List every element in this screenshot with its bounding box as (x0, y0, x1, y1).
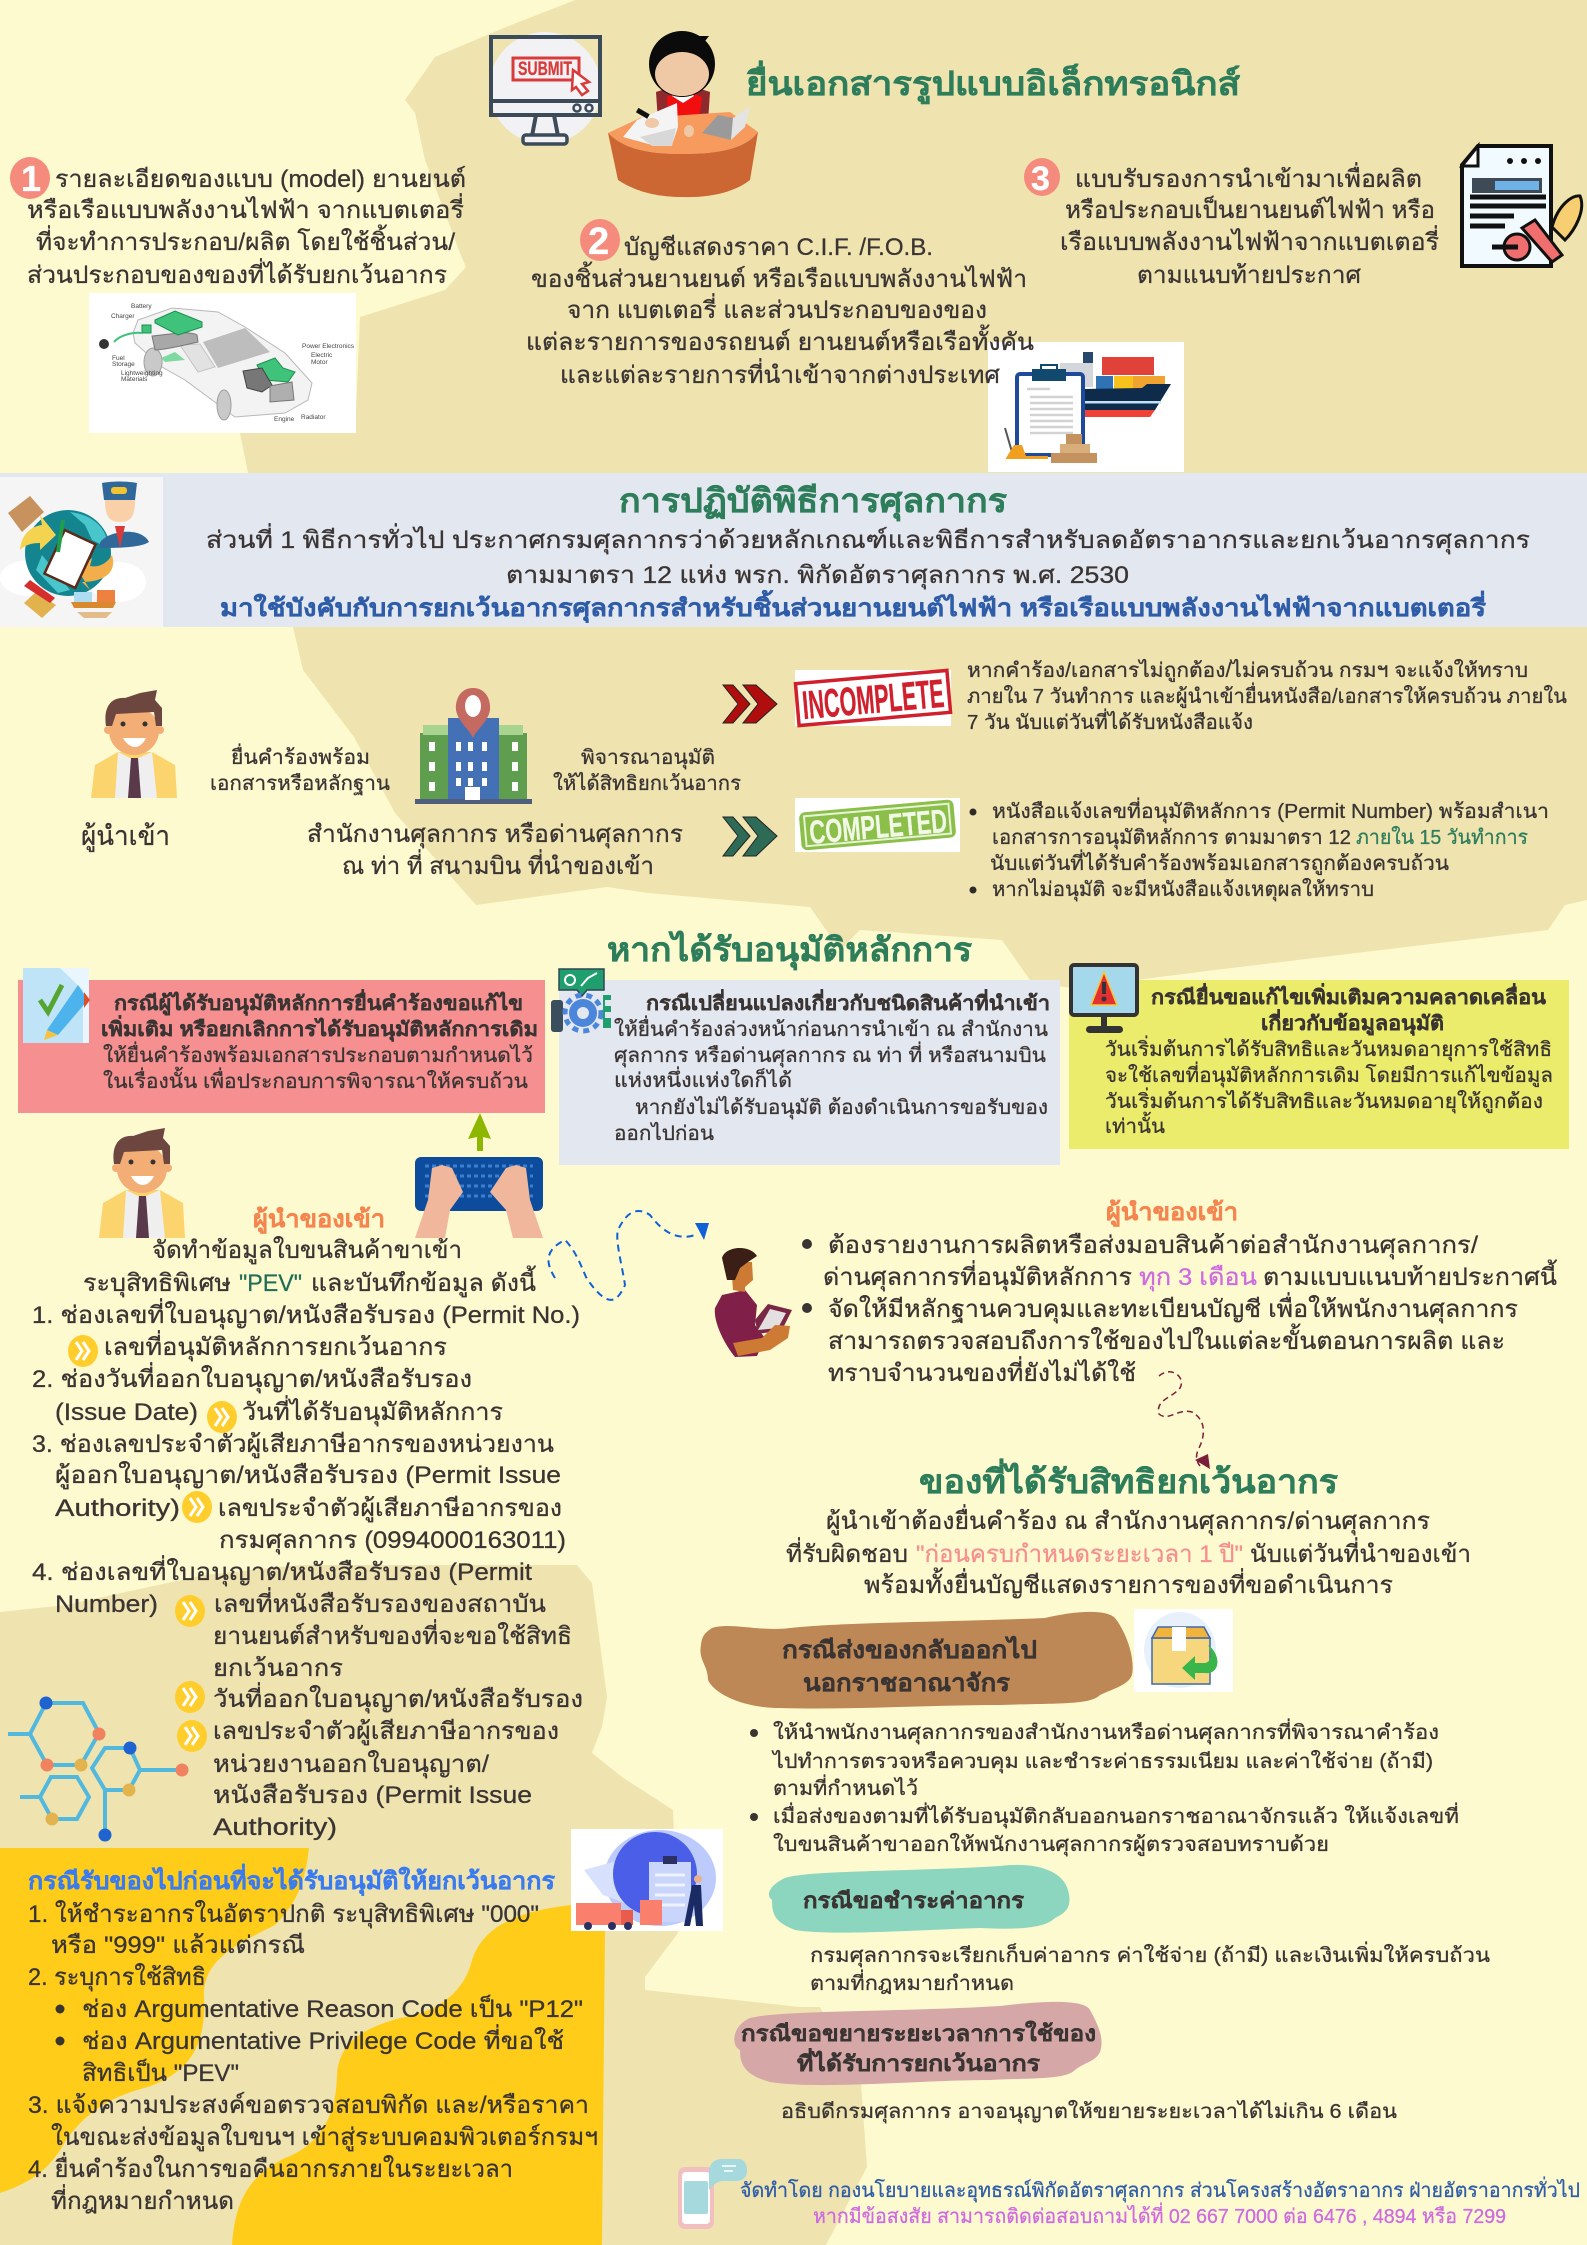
label: importer: ผู้นำเข้า (81, 821, 170, 852)
image: EV car diagram: Lightweighting (121, 370, 163, 377)
badge: number 3 (1024, 158, 1060, 198)
text block: completed notice: นับแต่วันที่ได้รับคำร้องพร้อมเอกสารถูกต้องครบถ้วน (990, 849, 1449, 876)
label blob: re-export case: นอกราชอาณาจักร (803, 1670, 1010, 1697)
arrow: green up arrow (468, 1113, 491, 1151)
text block: item 2 CIF FOB price list (526, 234, 1034, 389)
text block: duty collection (810, 1941, 1490, 1995)
text block: prepare import entry: วันที่ได้รับอนุมัติหลักการ (242, 1395, 503, 1427)
text block: one-year deadline: ผู้นำเข้าต้องยื่นคำร้อง ณ สำนักงานศุลกากร/ด่านศุลกากร (826, 1504, 1430, 1536)
text block: reporting duties: ต้องรายงานการผลิตหรือส่งมอบสินค้าต่อสำนักงานศุลกากร/ (828, 1232, 1478, 1260)
text block: incomplete notice: ภายใน 7 วันทำการ และผู้นำเข้ายื่นหนังสือ/เอกสารให้ครบถ้วน ภายใน (967, 682, 1567, 709)
panel: correction of data (1069, 980, 1569, 1149)
text block: item 2 CIF FOB price list: บัญชีแสดงราคา C.I.F. /F.O.B. (624, 234, 933, 261)
panel: correction of data: วันเริ่มต้นการได้รับสิทธิและวันหมดอายุให้ถูกต้อง (1105, 1087, 1543, 1114)
background shape: yellow wave left (0, 1848, 309, 2193)
text block: prepare import entry: หน่วยงานออกใบอนุญาต/ (213, 1750, 489, 1779)
text: submit request with documents (210, 743, 390, 795)
panel: correction of data: จะใช้เลขที่อนุมัติหลักการเดิม โดยมีการแก้ไขข้อมูล (1105, 1061, 1553, 1088)
icon: woman at desk (608, 31, 758, 197)
image: EV car diagram: Fuel (112, 355, 125, 362)
icon: document with stamp (1462, 146, 1582, 266)
text block: prepare import entry: และบันทึกข้อมูล ดังนี้ (311, 1265, 536, 1298)
image: EV car diagram: Materials (121, 376, 148, 383)
icon: submit monitor (489, 32, 601, 144)
text block: re-export steps: ใบขนสินค้าขาออกให้พนักงานศุลกากรผู้ตรวจสอบทราบด้วย (773, 1833, 1329, 1857)
image: EV car diagram: Battery (131, 303, 152, 310)
text block: prepare import entry: 1. ช่องเลขที่ใบอนุญาต/หนังสือรับรอง (Permit No.) (32, 1298, 580, 1330)
text block: prepare import entry (32, 1236, 583, 1841)
icon: yellow chevron bullet 6 (177, 1720, 207, 1752)
text block: re-export steps: ไปทำการตรวจหรือควบคุม และชำระค่าธรรมเนียม และค่าใช้จ่าย (ถ้ามี) (771, 1750, 1433, 1774)
text block: incomplete notice (967, 659, 1567, 734)
icon: yellow chevron bullet 2 (207, 1401, 237, 1433)
image: EV car diagram: Power Electronics (302, 343, 355, 350)
text block: prepare import entry: ผู้ออกใบอนุญาต/หนังสือรับรอง (Permit Issue (55, 1461, 561, 1490)
icon: submit monitor: SUBMIT (518, 59, 572, 80)
text block: duty collection: ตามที่กฎหมายกำหนด (810, 1969, 1014, 1995)
text block: prepare import entry: Number) (55, 1591, 158, 1618)
footer: prepared by: จัดทำโดย กองนโยบายและอุทธรณ์พิกัดอัตราศุลกากร ส่วนโครงสร้างอัตราอากร ฝ่ายอัตราอากรทั่วไป (740, 2176, 1580, 2203)
text block: re-export steps: เมื่อส่งของตามที่ได้รับอนุมัติกลับออกนอกราชอาณาจักรแล้ว ให้แจ้งเลขที่ (773, 1802, 1459, 1829)
text block: prepare import entry: Authority) (213, 1814, 337, 1841)
text block: item 3 import certificate: แบบรับรองการนำเข้ามาเพื่อผลิต (1075, 162, 1422, 193)
stamp: completed: COMPLETED (808, 802, 948, 851)
panel: product type change: ออกไปก่อน (614, 1122, 714, 1145)
text block: prepare import entry: 2. ช่องวันที่ออกใบอนุญาต/หนังสือรับรอง (32, 1362, 472, 1394)
stamp: incomplete: INCOMPLETE (801, 672, 946, 728)
text block: prepare import entry: กรมศุลกากร (0994000163011) (219, 1527, 566, 1555)
panel: refund case before approval: ช่อง Argumentative Reason Code เป็น "P12" (82, 1994, 583, 2023)
text block: item 2 CIF FOB price list: ของชิ้นส่วนยานยนต์ หรือเรือแบบพลังงานไฟฟ้า (531, 261, 1027, 293)
panel: refund case before approval: ช่อง Argumentative Privilege Code ที่ขอใช้ (82, 2024, 564, 2055)
panel: product type change: แห่งหนึ่งแห่งใดก็ได้ (614, 1066, 792, 1092)
icon: pencil and check (23, 968, 90, 1043)
panel: refund case before approval: ที่กฎหมายกำหนด (51, 2184, 234, 2215)
text block: prepare import entry: หนังสือรับรอง (Permit Issue (213, 1782, 532, 1809)
badge: number 1 (10, 157, 50, 199)
badge: number 2 (580, 219, 620, 263)
text block: item 3 import certificate: ตามแนบท้ายประกาศ (1137, 262, 1361, 289)
text block: completed notice: เอกสารการอนุมัติหลักการ ตามมาตรา 12 (992, 827, 1351, 850)
text block: reporting duties (802, 1232, 1557, 1387)
text block: one-year deadline: "ก่อนครบกำหนดระยะเวลา 1 ปี" (916, 1541, 1243, 1568)
panel: amend or cancel approval (18, 968, 545, 1113)
text block: item 1 model details (27, 165, 466, 289)
panel: refund case before approval: สิทธิเป็น "PEV" (82, 2058, 239, 2087)
stamp: incomplete (795, 670, 951, 729)
background shape: middle tan area (293, 627, 1587, 988)
text block: one-year deadline: นับแต่วันที่นำของเข้า (1250, 1537, 1471, 1568)
text block: prepare import entry: วันที่ออกใบอนุญาต/หนังสือรับรอง (213, 1682, 583, 1714)
heading: if approved in principle: หากได้รับอนุมัติหลักการ (607, 930, 972, 971)
text: consider approval: พิจารณาอนุมัติ (581, 747, 715, 770)
label: customs office: สำนักงานศุลกากร หรือด่านศุลกากร (307, 821, 683, 849)
panel: product type change (559, 980, 1060, 1165)
icon: importer person (91, 690, 177, 798)
icon: yellow chevron bullet 5 (175, 1681, 205, 1713)
text block: incomplete notice: หากคำร้อง/เอกสารไม่ถูกต้อง/ไม่ครบถ้วน กรมฯ จะแจ้งให้ทราบ (967, 659, 1528, 683)
text block: duty collection: กรมศุลกากรจะเรียกเก็บค่าอากร ค่าใช้จ่าย (ถ้ามี) และเงินเพิ่มให้ครบถ้วน (810, 1941, 1490, 1968)
text block: prepare import entry: 3. ช่องเลขประจำตัวผู้เสียภาษีอากรของหน่วยงาน (32, 1431, 554, 1459)
image: EV car diagram: Engine (274, 416, 295, 423)
text: submit request with documents: เอกสารหรือหลักฐาน (210, 773, 390, 795)
icon: gears and chart (551, 969, 611, 1032)
arrow: green double chevron (723, 817, 777, 856)
panel: product type change: ศุลกากร หรือด่านศุลกากร ณ ท่า ที่ หรือสนามบิน (614, 1041, 1046, 1068)
text block: item 3 import certificate (1060, 162, 1439, 289)
badge: number 2: 2 (588, 221, 609, 263)
panel: refund case before approval: ในขณะส่งข้อมูลใบขนฯ เข้าสู่ระบบคอมพิวเตอร์กรมฯ (51, 2123, 598, 2152)
image: EV car diagram (89, 293, 356, 433)
label: customs office: ณ ท่า ที่ สนามบิน ที่นำของเข้า (342, 849, 654, 880)
text block: prepare import entry: เลขประจำตัวผู้เสียภาษีอากรของ (218, 1495, 562, 1523)
text block: item 2 CIF FOB price list: แต่ละรายการของรถยนต์ ยานยนต์หรือเรือทั้งคัน (526, 324, 1034, 356)
text block: item 3 import certificate: หรือประกอบเป็นยานยนต์ไฟฟ้า หรือ (1065, 195, 1435, 224)
text: application to EV parts: มาใช้บังคับกับการยกเว้นอากรศุลกากรสำหรับชิ้นส่วนยานยนต์ไฟฟ้า หรือเรือแบบพลังงานไฟฟ้าจากแบตเตอรี่ (220, 589, 1486, 624)
panel: amend or cancel approval: กรณีผู้ได้รับอนุมัติหลักการยื่นคำร้องขอแก้ไข (114, 988, 523, 1017)
text block: item 1 model details: รายละเอียดของแบบ (model) ยานยนต์ (55, 165, 466, 193)
icon: customs officer and globe (0, 477, 163, 627)
panel: refund case before approval: 1. ให้ชำระอากรในอัตราปกติ ระบุสิทธิพิเศษ "000" (28, 1900, 539, 1929)
badge: number 1: 1 (21, 158, 41, 199)
image: cargo ship and clipboard (988, 342, 1184, 472)
icon: yellow chevron bullet 1 (68, 1335, 98, 1367)
text block: prepare import entry: Authority) (55, 1495, 180, 1522)
text block: one-year deadline: พร้อมทั้งยื่นบัญชีแสดงรายการของที่ขอดำเนินการ (864, 1567, 1393, 1599)
image: EV car diagram: Charger (111, 313, 135, 320)
panel: refund case before approval (28, 1863, 598, 2215)
text block: item 1 model details: หรือเรือแบบพลังงานไฟฟ้า จากแบตเตอรี่ (27, 193, 464, 224)
label blob: duty payment case (769, 1865, 1069, 1933)
image: EV car diagram: Electric (311, 352, 333, 359)
text block: completed notice: หนังสือแจ้งเลขที่อนุมัติหลักการ (Permit Number) พร้อมสำเนา (992, 797, 1549, 824)
text: section 12 reference: ตามมาตรา 12 แห่ง พรก. พิกัดอัตราศุลกากร พ.ศ. 2530 (506, 562, 1129, 590)
text: extension limit: อธิบดีกรมศุลกากร อาจอนุญาตให้ขยายระยะเวลาได้ไม่เกิน 6 เดือน (781, 2100, 1397, 2124)
badge: number 3: 3 (1031, 160, 1050, 198)
text block: item 1 model details: ที่จะทำการประกอบ/ผลิต โดยใช้ชิ้นส่วน/ (36, 224, 455, 256)
label blob: re-export case: กรณีส่งของกลับออกไป (782, 1635, 1037, 1664)
arrow: dark red dashed curve (1158, 1372, 1210, 1469)
text block: re-export steps: ให้นำพนักงานศุลกากรของสำนักงานหรือด่านศุลกากรที่พิจารณาคำร้อง (773, 1718, 1439, 1745)
panel: product type change: ให้ยื่นคำร้องล่วงหน้าก่อนการนำเข้า ณ สำนักงาน (614, 1015, 1048, 1041)
stamp: completed (795, 798, 960, 852)
text: submit request with documents: ยื่นคำร้องพร้อม (231, 743, 370, 769)
footer: contact: หากมีข้อสงสัย สามารถติดต่อสอบถามได้ที่ 02 667 7000 ต่อ 6476 , 4894 หรือ 7299 (813, 2202, 1506, 2228)
title: electronic document submission: ยื่นเอกสารรูปแบบอิเล็กทรอนิกส์ (746, 60, 1241, 105)
background shape: bottom-left tan area (0, 1565, 867, 2245)
panel: customs procedure banner (0, 473, 1587, 627)
background shape: yellow wave bottom (232, 1905, 605, 2245)
heading: duty-exempted goods: ของที่ได้รับสิทธิยกเว้นอากร (919, 1458, 1338, 1500)
text block: one-year deadline: ที่รับผิดชอบ (786, 1537, 908, 1568)
text block: prepare import entry: "PEV" (239, 1270, 302, 1297)
text block: completed notice: หากไม่อนุมัติ จะมีหนังสือแจ้งเหตุผลให้ทราบ (992, 878, 1374, 902)
label blob: extension case: ที่ได้รับการยกเว้นอากร (797, 2047, 1040, 2076)
label: goods importer right: ผู้นำของเข้า (1106, 1199, 1238, 1227)
panel: product type change: หากยังไม่ได้รับอนุมัติ ต้องดำเนินการขอรับของ (635, 1096, 1048, 1120)
text block: completed notice: ภายใน 15 วันทำการ (1356, 826, 1528, 849)
text block: item 3 import certificate: เรือแบบพลังงานไฟฟ้าจากแบตเตอรี่ (1060, 225, 1439, 256)
label: goods importer left: ผู้นำของเข้า (253, 1206, 385, 1234)
text block: re-export steps: ตามที่กำหนดไว้ (773, 1774, 918, 1800)
text: consider approval (553, 747, 741, 795)
panel: correction of data: วันเริ่มต้นการได้รับสิทธิและวันหมดอายุการใช้สิทธิ (1105, 1035, 1552, 1062)
text block: prepare import entry: เลขที่อนุมัติหลักการยกเว้นอากร (104, 1330, 447, 1362)
image: EV car diagram: Radiator (301, 414, 326, 421)
text block: one-year deadline (786, 1504, 1471, 1599)
text block: reporting duties: สามารถตรวจสอบถึงการใช้ของไปในแต่ละขั้นตอนการผลิต และ (828, 1323, 1505, 1355)
icon: returned parcel (1134, 1609, 1233, 1692)
panel: refund case before approval: 3. แจ้งความประสงค์ขอตรวจสอบพิกัด และ/หรือราคา (28, 2091, 589, 2119)
text block: prepare import entry: (Issue Date) (55, 1399, 198, 1426)
text block: prepare import entry: ระบุสิทธิพิเศษ (83, 1270, 231, 1298)
panel: refund case before approval: หรือ "999" แล้วแต่กรณี (51, 1932, 305, 1959)
background shape: top tan area (240, 0, 1587, 473)
panel: refund case before approval: 4. ยื่นคำร้องในการขอคืนอากรภายในระยะเวลา (28, 2152, 513, 2183)
text block: prepare import entry: เลขประจำตัวผู้เสียภาษีอากรของ (213, 1718, 559, 1746)
arrow: red double chevron (723, 685, 777, 723)
label blob: duty payment case: กรณีขอชำระค่าอากร (803, 1888, 1024, 1913)
text block: prepare import entry: ยกเว้นอากร (213, 1655, 343, 1682)
label blob: extension case: กรณีขอขยายระยะเวลาการใช้ของ (741, 2020, 1096, 2046)
panel: correction of data: เกี่ยวกับข้อมูลอนุมัติ (1261, 1008, 1444, 1037)
panel: amend or cancel approval: เพิ่มเติม หรือยกเลิกการได้รับอนุมัติหลักการเดิม (101, 1014, 538, 1042)
icon: man with tablet (715, 1248, 792, 1357)
panel: refund case before approval: กรณีรับของไปก่อนที่จะได้รับอนุมัติให้ยกเว้นอากร (28, 1863, 555, 1897)
panel: correction of data: กรณียื่นขอแก้ไขเพิ่มเติมความคลาดเคลื่อน (1151, 982, 1546, 1009)
label blob: re-export case (700, 1612, 1133, 1708)
heading: customs procedures: การปฏิบัติพิธีการศุลกากร (619, 482, 1007, 522)
text block: prepare import entry: 4. ช่องเลขที่ใบอนุญาต/หนังสือรับรอง (Permit (32, 1555, 532, 1587)
panel: refund case before approval: 2. ระบุการใช้สิทธิ (28, 1963, 206, 1992)
icon: warning monitor (1071, 965, 1137, 1033)
label blob: extension case (734, 2002, 1102, 2085)
icon: importer person 2 (99, 1128, 185, 1238)
text block: incomplete notice: 7 วัน นับแต่วันที่ได้รับหนังสือแจ้ง (967, 708, 1253, 734)
text block: reporting duties: ด่านศุลกากรที่อนุมัติหลักการ (823, 1260, 1132, 1292)
text: part 1 general procedure: ส่วนที่ 1 พิธีการทั่วไป ประกาศกรมศุลกากรว่าด้วยหลักเกณฑ์และพิธีการสำหรับลดอัตราอากรและยกเว้นอากรศุลกากร (206, 523, 1530, 555)
text block: prepare import entry: จัดทำข้อมูลใบขนสินค้าขาเข้า (152, 1236, 462, 1265)
text block: completed notice (970, 797, 1549, 902)
icon: yellow chevron bullet 3 (182, 1491, 212, 1523)
text block: reporting duties: ทุก 3 เดือน (1139, 1264, 1257, 1292)
text: consider approval: ให้ได้สิทธิยกเว้นอากร (553, 772, 741, 795)
panel: correction of data: เท่านั้น (1105, 1112, 1165, 1138)
icon: yellow chevron bullet 4 (175, 1595, 205, 1627)
text block: reporting duties: จัดให้มีหลักฐานควบคุมและทะเบียนบัญชี เพื่อให้พนักงานศุลกากร (828, 1292, 1518, 1324)
icon: keyboard with hands (415, 1157, 543, 1238)
text block: item 2 CIF FOB price list: และแต่ละรายการที่นำเข้าจากต่างประเทศ (560, 358, 1000, 389)
text block: re-export steps (750, 1718, 1459, 1857)
panel: amend or cancel approval: ในเรื่องนั้น เพื่อประกอบการพิจารณาให้ครบถ้วน (103, 1067, 528, 1093)
text block: item 1 model details: ส่วนประกอบของของที่ได้รับยกเว้นอากร (27, 258, 447, 289)
text block: prepare import entry: เลขที่หนังสือรับรองของสถาบัน (214, 1587, 546, 1618)
image: EV car diagram: Motor (311, 359, 328, 366)
icon: customs office building (415, 688, 532, 804)
text block: reporting duties: ตามแบบแนบท้ายประกาศนี้ (1263, 1259, 1557, 1291)
image: EV car diagram: Storage (112, 361, 135, 368)
text block: prepare import entry: ยานยนต์สำหรับของที่จะขอใช้สิทธิ (213, 1619, 572, 1650)
icon: hexagon molecule network (8, 1696, 188, 1842)
panel: product type change: กรณีเปลี่ยนแปลงเกี่ยวกับชนิดสินค้าที่นำเข้า (646, 988, 1050, 1015)
icon: phone with chat bubble (678, 2159, 747, 2229)
text block: reporting duties: ทราบจำนวนของที่ยังไม่ได้ใช้ (828, 1356, 1136, 1387)
arrow: blue dashed curve (548, 1211, 709, 1300)
image: logistics illustration (571, 1829, 723, 1931)
label: customs office (307, 821, 683, 880)
text block: item 2 CIF FOB price list: จาก แบตเตอรี่ และส่วนประกอบของของ (567, 293, 987, 324)
panel: amend or cancel approval: ให้ยื่นคำร้องพร้อมเอกสารประกอบตามกำหนดไว้ (103, 1041, 533, 1067)
